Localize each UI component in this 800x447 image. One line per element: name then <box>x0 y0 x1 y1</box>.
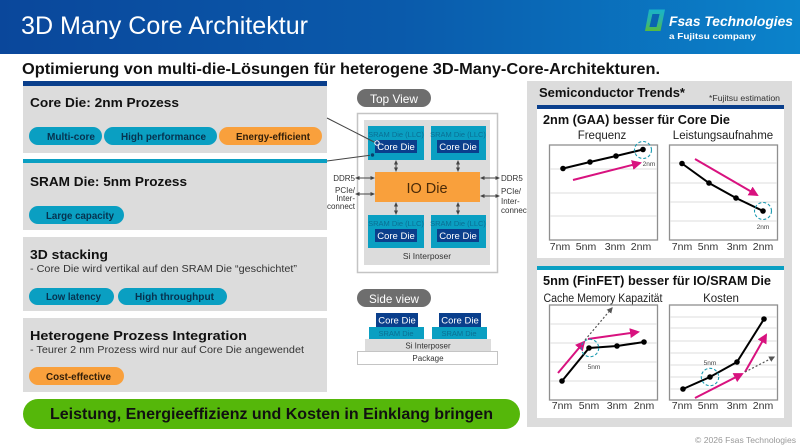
diagram: top view <box>327 114 530 272</box>
chart: Leistungsaufnahme: Leistungsaufnahme <box>673 130 773 142</box>
left interface labels: PCIe/ <box>335 186 356 195</box>
chart: Kosten <box>670 293 778 412</box>
panel: 3D stacking: 3D stacking <box>30 247 108 262</box>
chart: Cache Memory Kapazität <box>544 293 663 412</box>
right interface labels: Inter- <box>501 197 520 206</box>
tag: cost-effective <box>29 367 124 385</box>
tag: large capacity: Large capacity <box>46 211 114 222</box>
panel: semiconductor trends: Semiconductor Trends* <box>539 86 685 100</box>
chart: Cache Memory Kapazität: 7nm <box>552 400 572 412</box>
section: 5nm FinFET: 5nm (FinFET) besser für IO/SRAM Die <box>543 273 771 288</box>
die: top right <box>430 126 486 160</box>
chart: Frequenz: 7nm <box>550 241 570 253</box>
side view label <box>357 289 431 307</box>
conclusion banner: Leistung, Energieeffizienz und Kosten in Einklang bringen <box>50 406 493 423</box>
tag: high performance: High performance <box>121 132 206 143</box>
panel: heterogeneous process integration: Heterogene Prozess Integration <box>30 328 247 343</box>
panel: SRAM die <box>23 159 327 230</box>
diagram: side view: Core Die <box>441 316 479 326</box>
chart: Kosten: 5nm <box>704 360 716 367</box>
panel: semiconductor trends: *Fujitsu estimation <box>709 94 780 103</box>
diagram: side view: Core Die <box>378 316 416 326</box>
chart: Kosten: 3nm <box>727 400 747 412</box>
chart: Kosten: 2nm <box>753 400 773 412</box>
diagram: top view: Si Interposer <box>403 251 451 261</box>
panel: semiconductor trends <box>527 81 792 427</box>
chart: Frequenz: 3nm <box>605 241 625 253</box>
chart: Frequenz <box>550 130 658 253</box>
die: top left: SRAM Die (LLC) <box>368 130 424 139</box>
die: bottom left: Core Die <box>377 231 415 242</box>
tag: high throughput: High throughput <box>135 292 215 303</box>
logo: Fsas Technologies <box>645 10 793 41</box>
panel: core die <box>23 81 327 153</box>
die: top left: Core Die <box>377 142 415 153</box>
chart: Leistungsaufnahme: 5nm <box>698 241 718 253</box>
header banner <box>0 0 800 54</box>
left interface labels: connect <box>327 202 356 211</box>
tag: high performance <box>104 127 217 145</box>
chart: Kosten: 7nm <box>672 400 692 412</box>
conclusion banner <box>23 399 520 429</box>
die: top right: Core Die <box>439 142 477 153</box>
tag: low latency: Low latency <box>46 292 101 303</box>
die: bottom right <box>430 215 486 248</box>
diagram: side view <box>358 313 498 364</box>
left interface labels: Inter- <box>336 194 355 203</box>
section: 5nm FinFET <box>537 266 784 418</box>
panel: heterogeneous process integration: - Teurer 2 nm Prozess wird nur auf Core Die angewendet <box>30 345 304 356</box>
chart: Cache Memory Kapazität: Cache Memory Kapazität <box>544 293 663 305</box>
chart: Cache Memory Kapazität: 2nm <box>634 400 654 412</box>
tag: low latency <box>29 288 114 305</box>
panel: core die: Core Die: 2nm Prozess <box>30 95 179 110</box>
side view label: Side view <box>369 292 419 306</box>
right interface labels: connect <box>501 206 530 215</box>
subtitle: Optimierung von multi-die-Lösungen für heterogene 3D-Many-Core-Architekturen. <box>22 61 660 78</box>
panel: heterogeneous process integration <box>23 318 327 392</box>
chart: Frequenz: Frequenz <box>578 130 627 142</box>
right interface labels <box>501 174 530 215</box>
top view label: Top View <box>370 92 418 106</box>
chart: Kosten: Kosten <box>703 293 739 305</box>
title: 3D Many Core Architektur <box>21 12 308 40</box>
chart: Kosten: 5nm <box>698 400 718 412</box>
chart: Frequenz: 2nm <box>643 161 655 168</box>
tag: multi-core <box>29 127 102 145</box>
callout lines <box>327 118 379 161</box>
panel: SRAM die: SRAM Die: 5nm Prozess <box>30 174 187 189</box>
panel: 3D stacking <box>23 237 327 311</box>
die: top right: SRAM Die (LLC) <box>430 130 486 139</box>
die: top left <box>368 126 424 160</box>
IO die <box>375 172 480 202</box>
chart: Leistungsaufnahme: 2nm <box>753 241 773 253</box>
right interface labels: DDR5 <box>501 174 523 183</box>
tag: energy-efficient: Energy-efficient <box>236 132 311 143</box>
diagram: side view: Si Interposer <box>405 342 451 350</box>
chart: Leistungsaufnahme: 2nm <box>757 224 769 231</box>
right interface labels: PCIe/ <box>501 187 522 196</box>
left interface labels: DDR5 <box>333 174 356 183</box>
chart: Leistungsaufnahme: 7nm <box>672 241 692 253</box>
left interface labels <box>327 174 356 211</box>
arrows <box>357 162 498 213</box>
tag: cost-effective: Cost-effective <box>46 372 111 383</box>
die: bottom right: SRAM Die (LLC) <box>430 219 486 228</box>
section: 2nm GAA: 2nm (GAA) besser für Core Die <box>543 112 730 127</box>
chart: Frequenz: 5nm <box>576 241 596 253</box>
copyright: © 2026 Fsas Technologies <box>695 435 796 445</box>
diagram: side view: SRAM Die <box>378 329 414 338</box>
chart: Leistungsaufnahme <box>670 130 778 253</box>
section: 2nm GAA <box>537 105 784 258</box>
chart: Leistungsaufnahme: 3nm <box>727 241 747 253</box>
panel: 3D stacking: - Core Die wird vertikal auf den SRAM Die “geschichtet” <box>30 264 297 275</box>
die: bottom left <box>368 215 424 248</box>
tag: energy-efficient <box>219 127 322 145</box>
tag: multi-core: Multi-core <box>47 132 95 143</box>
tag: high throughput <box>118 288 227 305</box>
die: bottom left: SRAM Die (LLC) <box>368 219 424 228</box>
die: bottom right: Core Die <box>439 231 477 242</box>
chart: Cache Memory Kapazität: 5nm <box>588 364 600 371</box>
chart: Cache Memory Kapazität: 5nm <box>579 400 599 412</box>
chart: Frequenz: 2nm <box>631 241 651 253</box>
tag: large capacity <box>29 206 124 224</box>
diagram: side view: Package <box>412 354 444 363</box>
chart: Cache Memory Kapazität: 3nm <box>607 400 627 412</box>
top view label <box>357 89 431 107</box>
logo: Fsas Technologies: a Fujitsu company <box>669 31 756 41</box>
IO die: IO Die <box>406 181 448 197</box>
logo: Fsas Technologies: Fsas Technologies <box>669 13 793 29</box>
diagram: side view: SRAM Die <box>441 329 477 338</box>
